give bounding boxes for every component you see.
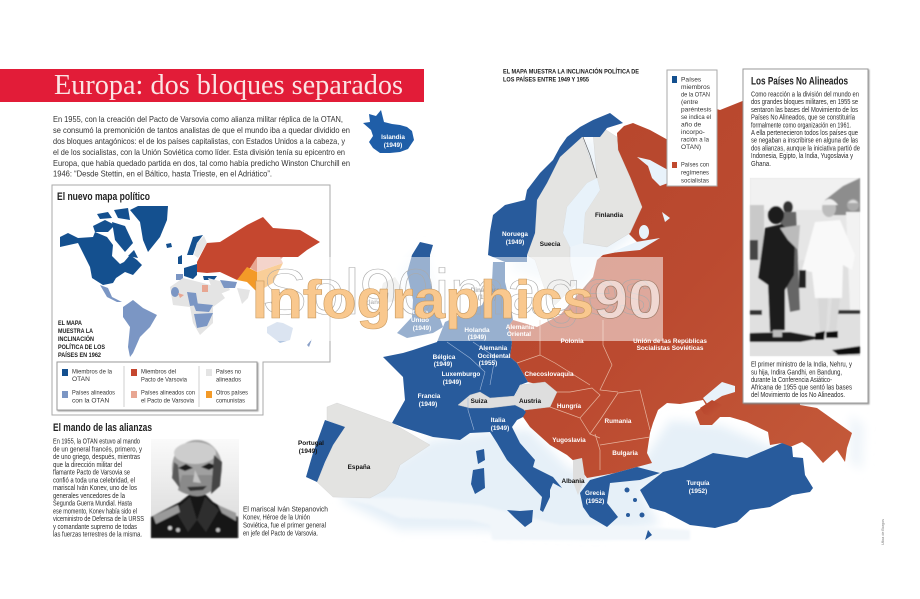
map labels: Albania — [561, 478, 585, 485]
photo caption: Soviética, fue el primer general — [243, 522, 326, 530]
legend: Europe map: OTAN) — [681, 144, 701, 151]
photo caption: Africana de 1955 que sentó las bases — [751, 384, 852, 392]
map labels: Noruega — [502, 231, 528, 238]
body text: En 1955, la OTAN estuvo al mando — [53, 438, 140, 446]
body text: de uno griego, después, mientras — [53, 454, 140, 461]
Turkey — [203, 276, 217, 280]
map labels: (1949) — [491, 425, 509, 432]
map labels: (1949) — [384, 142, 402, 149]
NATO: Portugal — [306, 420, 345, 482]
map labels: (1949) — [468, 334, 486, 341]
photo caption: del Movimiento de los No Alineados. — [751, 392, 845, 399]
legend: Europe map: año de — [681, 122, 702, 128]
map labels: (1949) — [443, 379, 461, 386]
intro text — [53, 114, 350, 178]
map labels: Checoslovaquia — [524, 371, 574, 378]
map labels: Polonia — [560, 338, 584, 345]
map title — [503, 66, 639, 84]
Mexico and Central America — [100, 285, 122, 302]
Africa — [170, 278, 225, 335]
body text — [53, 438, 144, 538]
map labels: Yugoslavia — [552, 437, 586, 444]
legend: Europe map — [667, 70, 717, 186]
map labels: Francia — [418, 393, 441, 400]
NATO: Iceland — [363, 110, 414, 153]
map labels: Portugal — [298, 440, 324, 447]
legend: world map — [57, 362, 257, 410]
legend: world map: Miembros del — [141, 368, 176, 376]
photo caption: El mariscal Iván Stepanovich — [243, 506, 328, 514]
body text — [751, 92, 860, 168]
legend: Europe map: Países — [681, 76, 702, 84]
white sea and lakes — [610, 157, 735, 405]
Arctic islands — [93, 208, 138, 258]
map labels: España — [348, 464, 371, 471]
map labels: (1949) — [299, 448, 317, 455]
world map — [60, 206, 320, 357]
NATO: islands — [471, 449, 533, 527]
map labels: Dinamarca — [471, 287, 504, 294]
map labels: Hungría — [557, 403, 582, 410]
photo: Konev — [151, 439, 239, 538]
body text: sentaron las bases del Movimiento de los — [751, 107, 858, 114]
map labels: Finlandia — [595, 212, 623, 219]
map labels: Unido — [411, 317, 429, 324]
north african coast — [333, 497, 690, 540]
photo caption: durante la Conferencia Asiático- — [751, 377, 833, 384]
body text: y comandante supremo de todas — [53, 524, 137, 531]
map labels: (1949) — [413, 325, 431, 332]
legend: world map: con la OTAN — [72, 398, 109, 404]
map labels: Occidental — [478, 353, 511, 360]
Mongolia — [250, 257, 283, 272]
photo caption: su hija, Indira Gandhi, en Bandung, — [751, 369, 842, 376]
photo caption: Konev, Héroe de la Unión — [243, 514, 310, 522]
legend: Europe map: Países con — [681, 162, 709, 168]
map labels: Unión de las Repúblicas — [633, 338, 707, 345]
intro text: dos bloques antagónicos: el de los países capitalistas, con Estados Unidos a la cabeza, y — [53, 136, 346, 146]
legend: world map: Países alineados — [72, 390, 116, 396]
map labels: (1955) — [479, 360, 497, 367]
Albania — [573, 458, 585, 495]
body text: viceministro de Defensa de la URSS — [53, 516, 144, 523]
body text: las fuerzas terrestres de la misma. — [53, 532, 142, 538]
map labels: Luxemburgo — [442, 371, 480, 378]
body text: formalmente como organización en 1961. — [751, 122, 851, 129]
map labels: Bulgaria — [612, 450, 638, 457]
internal borders — [517, 320, 650, 470]
legend: world map: Pacto de Varsovia — [141, 376, 187, 384]
legend: world map: Países alineados con — [141, 390, 195, 396]
map labels: Oriental — [507, 331, 531, 338]
neutral Scandinavia — [527, 128, 642, 305]
panel: El mando de las alianzas — [53, 422, 328, 538]
photo caption: El primer ministro de la India, Nehru, y — [751, 362, 852, 368]
legend: world map: el Pacto de Varsovia — [141, 398, 194, 404]
body text: ese momento, Konev había sido el — [53, 508, 137, 515]
Nehru — [802, 220, 855, 298]
Greenland — [130, 206, 168, 252]
Scandinavia — [187, 235, 203, 255]
photo caption — [243, 506, 328, 538]
sea glow around the coasts — [340, 135, 864, 535]
woman — [768, 206, 784, 224]
map note — [58, 320, 105, 359]
legend: world map: comunistas — [216, 398, 246, 404]
map note: EL MAPA — [58, 320, 82, 327]
map labels: Alemania — [506, 324, 535, 331]
body text: Como reacción a la división del mundo en — [751, 92, 859, 98]
photo: Nehru and Indira Gandhi — [750, 178, 860, 356]
heading: El nuevo mapa político — [57, 191, 150, 203]
body text: Países No Alineados, que se constituiría — [751, 115, 855, 122]
shadows on ground — [750, 332, 823, 342]
map labels: Islandia — [381, 134, 405, 141]
legend: Europe map: se indica el — [681, 114, 711, 121]
NATO: Britain — [397, 242, 443, 338]
Western Europe — [178, 255, 197, 279]
body text: flamante Pacto de Varsovia se — [53, 470, 130, 476]
body text: Indonesia, Egipto, la India, Yugoslavia y — [751, 153, 853, 160]
map labels: Turquía — [687, 480, 710, 487]
body text: dos grandes bloques militares, en 1955 se — [751, 99, 858, 106]
legend: Europe map: (entre — [681, 99, 699, 106]
heading: Los Países No Alineados — [751, 76, 848, 88]
NATO: Turkey — [640, 443, 813, 528]
map labels: Suiza — [471, 398, 488, 405]
map labels: (1952) — [689, 488, 707, 495]
NATO: Greece — [580, 467, 660, 527]
NATO: western Europe and Italy — [383, 282, 562, 512]
intro text: 1946: “Desde Stettin, en el Báltico, hasta Trieste, en el Adriático”. — [53, 168, 272, 178]
map note: PAÍSES EN 1962 — [58, 350, 101, 359]
China — [237, 263, 283, 292]
neutral Iberia — [317, 403, 430, 498]
African blocs — [171, 287, 213, 328]
map title: EL MAPA MUESTRA LA INCLINACIÓN POLÍTICA DE — [503, 66, 639, 76]
map labels: Italia — [491, 417, 506, 424]
background figures — [783, 201, 793, 213]
legend: Europe map: ración a la — [681, 136, 709, 144]
watermark: Sol90images — [262, 256, 652, 328]
South America — [123, 300, 157, 357]
body text: que la dirección militar del — [53, 462, 122, 469]
body text: Ghana. — [751, 161, 771, 168]
map labels: (1949) — [419, 401, 437, 408]
map labels: Austria — [519, 398, 541, 405]
Ireland — [380, 277, 402, 303]
panel: El nuevo mapa político — [52, 185, 330, 415]
Australia — [267, 322, 293, 343]
body text: confió a toda una celebridad, el — [53, 477, 135, 484]
map labels: Bélgica — [433, 354, 456, 361]
map note: POLÍTICA DE LOS — [58, 342, 105, 351]
landmass: Soviet bloc — [508, 100, 852, 478]
map title: LOS PAÍSES ENTRE 1949 Y 1955 — [503, 74, 589, 84]
Middle East and South Asia — [208, 278, 230, 296]
legend: Europe map: socialistas — [681, 178, 710, 184]
map labels — [298, 134, 710, 505]
intro text: el de los socialistas, con la Unión Soviética como líder. Esta división tenía su epicentro en — [53, 147, 345, 157]
Iceland small — [166, 243, 172, 248]
body text: se negaban a inscribirse en alguna de las — [751, 138, 858, 145]
North America — [60, 232, 142, 285]
intro text: En 1955, con la creación del Pacto de Varsovia como alianza militar réplica de la OTAN, — [53, 114, 343, 124]
map note: MUESTRA LA — [58, 328, 93, 335]
map labels: Reino — [410, 309, 428, 316]
NATO: Norway — [488, 113, 623, 262]
legend: world map: alineados — [216, 376, 242, 384]
watermark: 90 — [594, 270, 662, 330]
map labels: (1949) — [434, 361, 452, 368]
main map of Europe — [298, 100, 864, 540]
legend: world map: OTAN — [72, 376, 90, 383]
map labels: (1949) — [478, 294, 496, 301]
intro text: Europa, que había quedado partida en dos, tal como había predicho Winston Churchill en — [53, 158, 350, 168]
map labels: Irlanda — [365, 299, 386, 306]
body text: A ella pertenecieron todos los países que — [751, 130, 858, 137]
map note: INCLINACIÓN — [58, 334, 94, 343]
NATO: Denmark — [492, 262, 505, 282]
title banner: Europa: dos bloques separados — [54, 69, 403, 101]
legend: Europe map: incorpo- — [681, 129, 705, 136]
USSR — [197, 217, 320, 280]
map labels: Socialistas Soviéticas — [637, 345, 704, 352]
panel: Los Países No Alineados — [743, 69, 868, 403]
legend: Europe map: regímenes — [681, 170, 710, 176]
map labels: (1952) — [586, 498, 604, 505]
body text: mariscal Iván Konev, uno de los — [53, 485, 137, 492]
legend: world map: Países no — [216, 368, 241, 376]
legend: Europe map: de la OTAN — [681, 92, 710, 98]
photo caption: en jefe del Pacto de Varsovia. — [243, 530, 318, 538]
Aegean islands — [624, 488, 652, 540]
body text: dos alianzas, aunque la iniciativa partió de — [751, 145, 860, 152]
map labels: (1949) — [506, 239, 524, 246]
map labels: Alemania — [479, 345, 508, 352]
Crimea — [700, 400, 722, 417]
map labels: Holanda — [464, 327, 490, 334]
bay of bothnia tint — [563, 178, 600, 247]
map labels: Suecia — [540, 241, 561, 248]
legend: world map: Otros países — [216, 390, 249, 396]
legend: Europe map: miembros — [681, 84, 711, 91]
Alps: Switzerland and Austria — [458, 382, 557, 410]
legend: world map: Miembros de la — [72, 368, 112, 376]
credit: Ulloa de Burgos — [880, 519, 885, 545]
map labels: Grecia — [585, 490, 605, 497]
legend: Europe map: paréntesis — [681, 106, 712, 114]
body text: Segunda Guerra Mundial. Hasta — [53, 500, 132, 508]
map labels: Rumania — [604, 418, 632, 425]
body text: generales vencedores de la — [53, 493, 125, 500]
intro text: se consumó la premonición de tantos analistas de que el mundo iba a quedar dividido en — [53, 125, 350, 135]
body text: de un general francés, primero, y — [53, 446, 142, 453]
heading: El mando de las alianzas — [53, 422, 152, 434]
watermark: Infographics — [252, 270, 594, 330]
photo caption — [751, 362, 852, 399]
